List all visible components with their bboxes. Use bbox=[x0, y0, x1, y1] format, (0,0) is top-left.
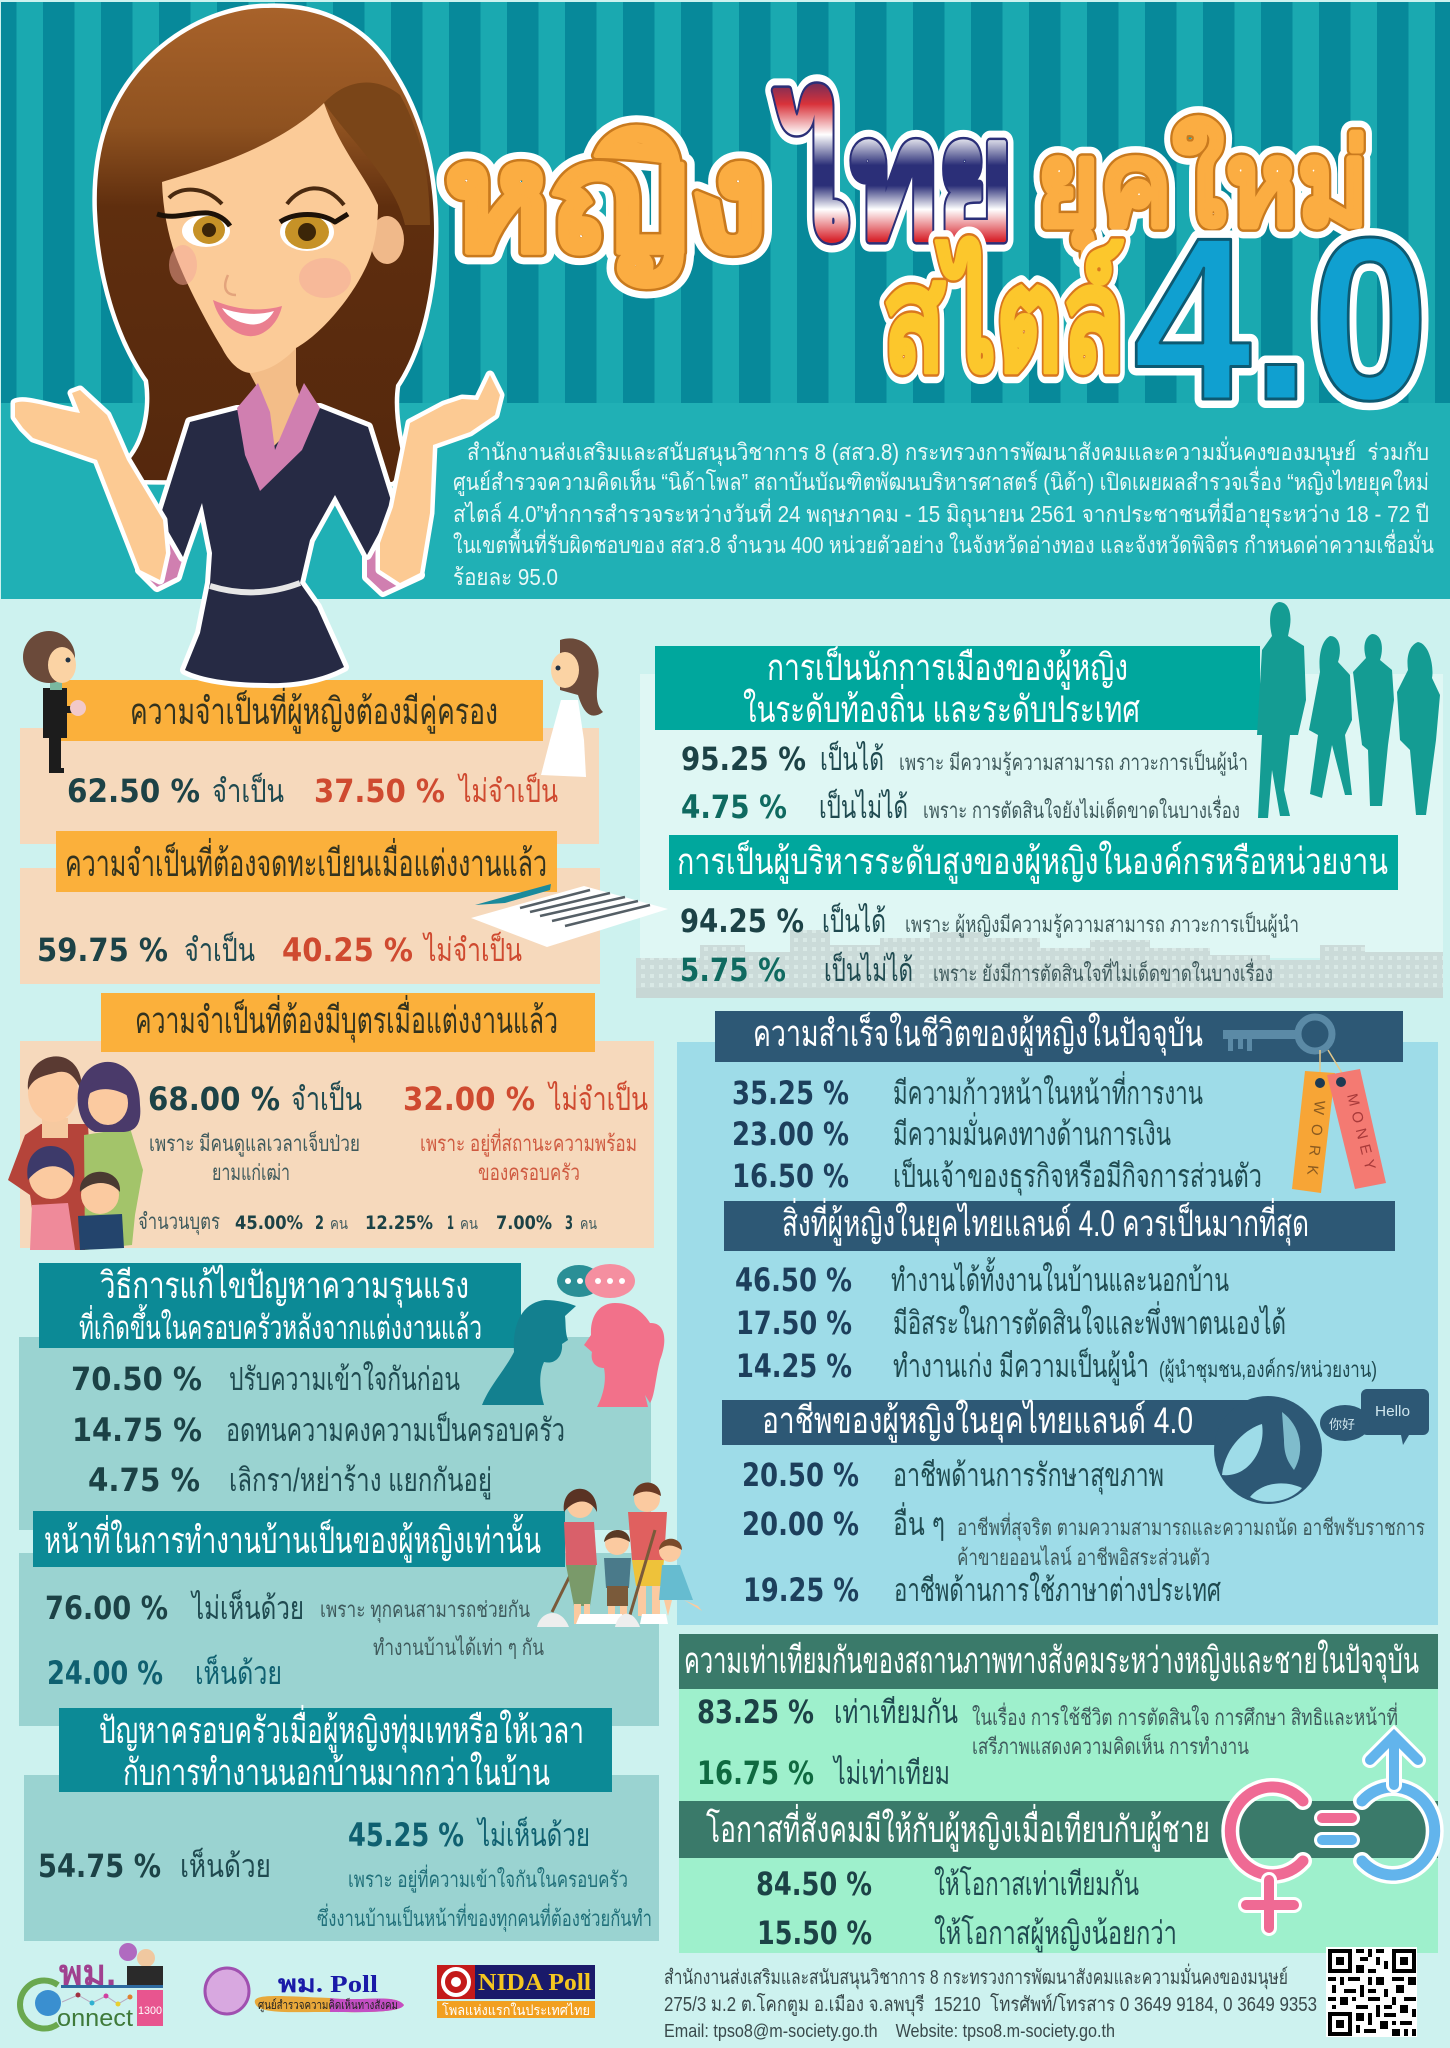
title word style: สไตล์ bbox=[883, 237, 1124, 401]
title word modern era: ยุคใหม่ bbox=[1036, 117, 1369, 258]
left cuff bbox=[140, 520, 183, 587]
stat less opportunity: 15.50 % bbox=[757, 1914, 872, 1952]
stat 35.25: 35.25 % bbox=[732, 1074, 849, 1112]
title word women: หญิง bbox=[444, 114, 768, 287]
reason bbox=[320, 1597, 544, 1660]
label progress: มีความก้าวหน้าในหน้าที่การงาน bbox=[893, 1071, 1203, 1111]
stat 19.25: 19.25 % bbox=[743, 1571, 859, 1609]
stat agree: 54.75 % bbox=[38, 1847, 161, 1885]
panel: equality bbox=[679, 1634, 1438, 1953]
heading text: ความจำเป็นที่ต้องจดทะเบียนเมื่อแต่งงานแล้ว bbox=[65, 837, 547, 884]
stat 14.25: 14.25 % bbox=[736, 1347, 852, 1385]
logo: ministry poll: พม. Poll bbox=[278, 1972, 378, 1998]
title word style bbox=[883, 237, 1124, 401]
heading executives bbox=[669, 835, 1398, 890]
number of children: คน bbox=[580, 1216, 597, 1233]
eyebrows bbox=[169, 188, 344, 205]
woman character bbox=[15, 8, 500, 683]
stat disagree: 76.00 % bbox=[45, 1589, 168, 1627]
reason: เพราะ ทุกคนสามารถช่วยกัน bbox=[320, 1597, 530, 1623]
label adjust: ปรับความเข้าใจกันก่อน bbox=[229, 1361, 460, 1397]
label necessary: จำเป็น bbox=[184, 931, 255, 968]
icon: talking heads bbox=[482, 1264, 664, 1407]
icon: work and money tags bbox=[1292, 1050, 1386, 1193]
reason cannot: เพราะ ยังมีการตัดสินใจที่ไม่เด็ดขาดในบางเรื่อง bbox=[933, 958, 1273, 986]
panel: registration need bbox=[20, 831, 600, 984]
panel: marriage need bbox=[20, 680, 599, 844]
logo: connect: พม. bbox=[59, 1952, 116, 1993]
left eye bbox=[157, 213, 230, 247]
heading success bbox=[715, 1011, 1403, 1062]
heading text: ความจำเป็นที่ผู้หญิงต้องมีคู่ครอง bbox=[130, 685, 498, 734]
label agree: เห็นด้วย bbox=[195, 1654, 282, 1691]
label both: ทำงานได้ทั้งงานในบ้านและนอกบ้าน bbox=[891, 1257, 1229, 1298]
ear bbox=[370, 216, 404, 264]
label cannot: เป็นไม่ได้ bbox=[819, 788, 908, 825]
stat cannot: 5.75 % bbox=[680, 951, 786, 989]
icon: key bbox=[1223, 1017, 1332, 1051]
label cannot: เป็นไม่ได้ bbox=[824, 951, 913, 988]
stat 20.50: 20.50 % bbox=[742, 1456, 859, 1494]
stat can: 95.25 % bbox=[681, 740, 806, 778]
footer contact: Email: tpso8@m-society.go.th Website: tpso8.m-society.go.th bbox=[664, 2021, 1115, 2041]
stat 20.00: 20.00 % bbox=[742, 1505, 859, 1543]
reason: ซึ่งงานบ้านเป็นหน้าที่ของทุกคนที่ต้องช่วยกันทำ bbox=[317, 1903, 652, 1932]
label language: อาชีพด้านการใช้ภาษาต่างประเทศ bbox=[894, 1572, 1221, 1608]
left arm bbox=[15, 390, 166, 580]
title word style: สไตล์ bbox=[883, 237, 1124, 401]
icon: pen and paper bbox=[471, 884, 668, 947]
reason not necessary: เพราะ อยู่ที่สถานะความพร้อม bbox=[420, 1128, 637, 1157]
stat 16.50: 16.50 % bbox=[732, 1157, 849, 1195]
right arm bbox=[380, 375, 500, 583]
reason can: เพราะ ผู้หญิงมีความรู้ความสามารถ ภาวะการเป็นผู้นำ bbox=[905, 910, 1299, 938]
reason necessary: ยามแก่เฒ่า bbox=[212, 1160, 290, 1185]
icon: family bbox=[8, 1056, 143, 1250]
stat not necessary: 37.50 % bbox=[314, 772, 445, 810]
note leader: (ผู้นำชุมชน,องค์กร/หน่วยงาน) bbox=[1159, 1357, 1377, 1383]
label health: อาชีพด้านการรักษาสุขภาพ bbox=[893, 1457, 1164, 1495]
icon: speech bubbles: Hello bbox=[1375, 1403, 1410, 1420]
label unequal: ไม่เท่าเทียม bbox=[832, 1755, 950, 1791]
reason can: เพราะ มีความรู้ความสามารถ ภาวะการเป็นผู้นำ bbox=[899, 748, 1248, 776]
city skyline bbox=[636, 930, 1443, 998]
stat not necessary: 40.25 % bbox=[282, 931, 413, 969]
label disagree: ไม่เห็นด้วย bbox=[476, 1816, 590, 1853]
heading opportunity bbox=[679, 1801, 1438, 1858]
icon: speech bubbles: 你好 bbox=[1329, 1417, 1355, 1432]
right cuff bbox=[367, 507, 420, 592]
title word thai: ไทย bbox=[774, 86, 1013, 272]
note other bbox=[957, 1512, 1425, 1570]
heading bbox=[101, 993, 595, 1052]
suit bbox=[160, 408, 393, 683]
panel background bbox=[677, 1042, 1438, 1625]
footer contact: สำนักงานส่งเสริมและสนับสนุนวิชาการ 8 กระทรวงการพัฒนาสังคมและความมั่นคงของมนุษย์ bbox=[664, 1963, 1288, 1990]
stat 46.50: 46.50 % bbox=[735, 1261, 852, 1299]
reason not necessary bbox=[420, 1128, 637, 1185]
number of children: 1 bbox=[447, 1212, 454, 1234]
footer contact bbox=[664, 1963, 1317, 2041]
title word modern era: ยุคใหม่ bbox=[1036, 117, 1369, 258]
heading text: ความจำเป็นที่ต้องมีบุตรเมื่อแต่งงานแล้ว bbox=[135, 994, 558, 1043]
number of children: จำนวนบุตร bbox=[138, 1209, 220, 1235]
intro paragraph bbox=[453, 436, 1434, 590]
label can: เป็นได้ bbox=[822, 902, 886, 939]
label not necessary: ไม่จำเป็น bbox=[422, 931, 522, 968]
stat necessary: 68.00 % bbox=[148, 1080, 280, 1118]
logo: connect bbox=[20, 1943, 163, 2032]
label equal opportunity: ให้โอกาสเท่าเทียมกัน bbox=[934, 1866, 1139, 1902]
panel background bbox=[20, 868, 600, 984]
blush bbox=[169, 245, 197, 285]
heading text: วิธีการแก้ไขปัญหาความรุนแรง bbox=[100, 1264, 469, 1308]
label equal: เท่าเทียมกัน bbox=[834, 1694, 958, 1730]
stat cannot: 4.75 % bbox=[681, 788, 787, 826]
title word modern era: ยุคใหม่ bbox=[1036, 117, 1369, 258]
stat necessary: 59.75 % bbox=[37, 931, 168, 969]
belt bbox=[210, 583, 300, 592]
panel: children need bbox=[20, 993, 654, 1248]
panel background bbox=[19, 1337, 651, 1530]
stat equal opportunity: 84.50 % bbox=[756, 1865, 872, 1903]
heading politics text bbox=[743, 644, 1140, 730]
number of children bbox=[138, 1209, 597, 1235]
label endure: อดทนความคงความเป็นครอบครัว bbox=[226, 1411, 565, 1448]
label other: อื่น ๆ bbox=[893, 1502, 945, 1542]
title word thai: ไทย bbox=[774, 86, 1013, 272]
title word style: สไตล์ bbox=[883, 237, 1124, 401]
stat equal: 83.25 % bbox=[697, 1693, 814, 1731]
note other: ค้าขายออนไลน์ อาชีพอิสระส่วนตัว bbox=[957, 1545, 1210, 1570]
reason not necessary: ของครอบครัว bbox=[478, 1160, 580, 1185]
label finance: มีความมั่นคงทางด้านการเงิน bbox=[893, 1112, 1171, 1152]
heading should be bbox=[724, 1201, 1395, 1251]
number of children: คน bbox=[330, 1216, 348, 1233]
label divorce: เลิกรา/หย่าร้าง แยกกันอยู่ bbox=[229, 1462, 492, 1500]
intro band bbox=[1, 403, 1450, 599]
heading politics bbox=[655, 646, 1260, 730]
logo: ministry poll bbox=[205, 1968, 404, 2014]
label necessary: จำเป็น bbox=[212, 772, 284, 809]
logo: nida poll bbox=[437, 1965, 595, 2018]
icon: women silhouettes bbox=[1257, 602, 1440, 818]
stat 17.50: 17.50 % bbox=[736, 1304, 852, 1342]
panel: housework duty bbox=[19, 1511, 659, 1726]
number of children: 7.00% bbox=[496, 1212, 552, 1234]
logo: nida poll: โพลแห่งแรกในประเทศไทย bbox=[442, 2002, 590, 2018]
label agree: เห็นด้วย bbox=[180, 1847, 271, 1884]
stat agree: 24.00 % bbox=[47, 1654, 163, 1692]
label disagree: ไม่เห็นด้วย bbox=[190, 1589, 304, 1626]
heading bbox=[56, 831, 557, 892]
heading equality bbox=[679, 1634, 1438, 1689]
title word thai: ไทย bbox=[774, 86, 1013, 272]
logo: nida poll: NIDA Poll bbox=[478, 1970, 591, 1996]
panel background bbox=[679, 1689, 1438, 1953]
panel: politics and executives bbox=[636, 644, 1443, 998]
stat can: 94.25 % bbox=[680, 902, 804, 940]
number of children: 45.00% bbox=[235, 1212, 303, 1234]
heading text: กับการทำงานนอกบ้านมากกว่าในบ้าน bbox=[123, 1751, 550, 1793]
title word women: หญิง bbox=[444, 114, 768, 287]
panel background bbox=[20, 728, 599, 844]
heading text bbox=[79, 1264, 482, 1346]
note equal: เสรีภาพแสดงความคิดเห็น การทำงาน bbox=[972, 1732, 1249, 1759]
heading bbox=[33, 1511, 565, 1567]
nose bbox=[225, 275, 236, 295]
heading text bbox=[99, 1704, 584, 1793]
icon: speech bubbles bbox=[1320, 1389, 1429, 1445]
heading bbox=[59, 1708, 612, 1792]
title bbox=[444, 86, 1429, 449]
intro paragraph: ร้อยละ 95.0 bbox=[453, 564, 558, 590]
teeth bbox=[222, 308, 274, 324]
label not necessary: ไม่จำเป็น bbox=[547, 1080, 648, 1117]
reason: ทำงานบ้านได้เท่า ๆ กัน bbox=[373, 1635, 544, 1660]
icon: work and money tags: WORK bbox=[1303, 1100, 1328, 1176]
panel: success and career bbox=[677, 1010, 1438, 1625]
panel background bbox=[24, 1775, 659, 1941]
logo: ministry poll: ศูนย์สำรวจความคิดเห็นทางสังคม bbox=[258, 1997, 398, 2013]
right eye bbox=[280, 213, 348, 251]
face bbox=[162, 103, 378, 373]
title number 4.0: 4.0 bbox=[1133, 190, 1429, 449]
label can: เป็นได้ bbox=[820, 740, 884, 777]
hair shade bbox=[324, 83, 430, 225]
stat necessary: 62.50 % bbox=[67, 772, 200, 810]
number of children: 3 bbox=[565, 1212, 573, 1234]
title word women: หญิง bbox=[444, 114, 768, 287]
mouth bbox=[213, 300, 282, 336]
number of children: 2 bbox=[315, 1212, 324, 1234]
heading politics text: การเป็นนักการเมืองของผู้หญิง bbox=[767, 644, 1128, 690]
number of children: 12.25% bbox=[365, 1212, 433, 1234]
title number 4.0: 4.0 bbox=[1133, 190, 1429, 449]
stat unequal: 16.75 % bbox=[697, 1754, 814, 1792]
heading text: ที่เกิดขึ้นในครอบครัวหลังจากแต่งงานแล้ว bbox=[79, 1304, 482, 1346]
reason necessary: เพราะ มีคนดูแลเวลาเจ็บป่วย bbox=[149, 1129, 360, 1157]
footer contact: 275/3 ม.2 ต.โคกตูม อ.เมือง จ.ลพบุรี 15210 โทรศัพท์/โทรสาร 0 3649 9184, 0 3649 9353 bbox=[664, 1993, 1317, 2017]
blush bbox=[299, 258, 351, 298]
panel: family problem bbox=[24, 1704, 659, 1941]
header stripes bbox=[1, 2, 1450, 403]
panel background bbox=[19, 1553, 659, 1726]
stat not necessary: 32.00 % bbox=[403, 1080, 535, 1118]
panel: violence solutions bbox=[19, 1263, 651, 1530]
number of children: คน bbox=[460, 1216, 478, 1233]
logo: connect: 1300 bbox=[138, 2005, 162, 2017]
heading opportunity text: โอกาสที่สังคมมีให้กับผู้หญิงเมื่อเทียบกับผู้ชาย bbox=[706, 1803, 1210, 1852]
heading text: หน้าที่ในการทำงานบ้านเป็นของผู้หญิงเท่านั้น bbox=[44, 1513, 541, 1563]
stat 4.75: 4.75 % bbox=[88, 1461, 200, 1499]
label business: เป็นเจ้าของธุรกิจหรือมีกิจการส่วนตัว bbox=[893, 1157, 1262, 1196]
reason necessary bbox=[149, 1129, 360, 1185]
heading career text: อาชีพของผู้หญิงในยุคไทยแลนด์ 4.0 bbox=[762, 1399, 1193, 1443]
heading bbox=[39, 1263, 521, 1348]
label leader: ทำงานเก่ง มีความเป็นผู้นำ bbox=[893, 1347, 1149, 1386]
panel background bbox=[640, 674, 1443, 958]
icon: work and money tags: MONEY bbox=[1343, 1092, 1378, 1172]
QR code bbox=[1326, 1947, 1417, 2037]
heading career bbox=[722, 1400, 1265, 1445]
stat 14.75: 14.75 % bbox=[72, 1411, 202, 1449]
icon: woman with leaves bbox=[1214, 1396, 1322, 1504]
reason bbox=[317, 1864, 652, 1932]
heading success text: ความสำเร็จในชีวิตของผู้หญิงในปัจจุบัน bbox=[753, 1010, 1203, 1056]
heading bbox=[53, 680, 543, 741]
panel background bbox=[20, 1041, 654, 1248]
label independence: มีอิสระในการตัดสินใจและพึ่งพาตนเองได้ bbox=[893, 1301, 1286, 1341]
hair bbox=[97, 8, 434, 482]
neck bbox=[232, 340, 306, 450]
note equal bbox=[972, 1702, 1398, 1759]
stat disagree: 45.25 % bbox=[348, 1816, 464, 1854]
icon: gender equality bbox=[1230, 1736, 1435, 1928]
reason cannot: เพราะ การตัดสินใจยังไม่เด็ดขาดในบางเรื่อง bbox=[923, 795, 1240, 823]
collar bbox=[237, 383, 320, 491]
label not necessary: ไม่จำเป็น bbox=[457, 772, 558, 809]
stat 23.00: 23.00 % bbox=[732, 1115, 849, 1153]
logo: connect: onnect bbox=[57, 2005, 133, 2032]
stat 70.50: 70.50 % bbox=[71, 1360, 202, 1398]
label less opportunity: ให้โอกาสผู้หญิงน้อยกว่า bbox=[934, 1915, 1177, 1953]
label necessary: จำเป็น bbox=[291, 1080, 362, 1117]
reason: เพราะ อยู่ที่ความเข้าใจกันในครอบครัว bbox=[348, 1864, 628, 1893]
icon: family cleaning bbox=[537, 1482, 702, 1627]
icon: groom bbox=[23, 631, 86, 773]
icon: bride bbox=[541, 638, 603, 777]
heading text: ปัญหาครอบครัวเมื่อผู้หญิงทุ่มเทหรือให้เวลา bbox=[99, 1704, 584, 1753]
heading politics text: ในระดับท้องถิ่น และระดับประเทศ bbox=[743, 683, 1140, 730]
